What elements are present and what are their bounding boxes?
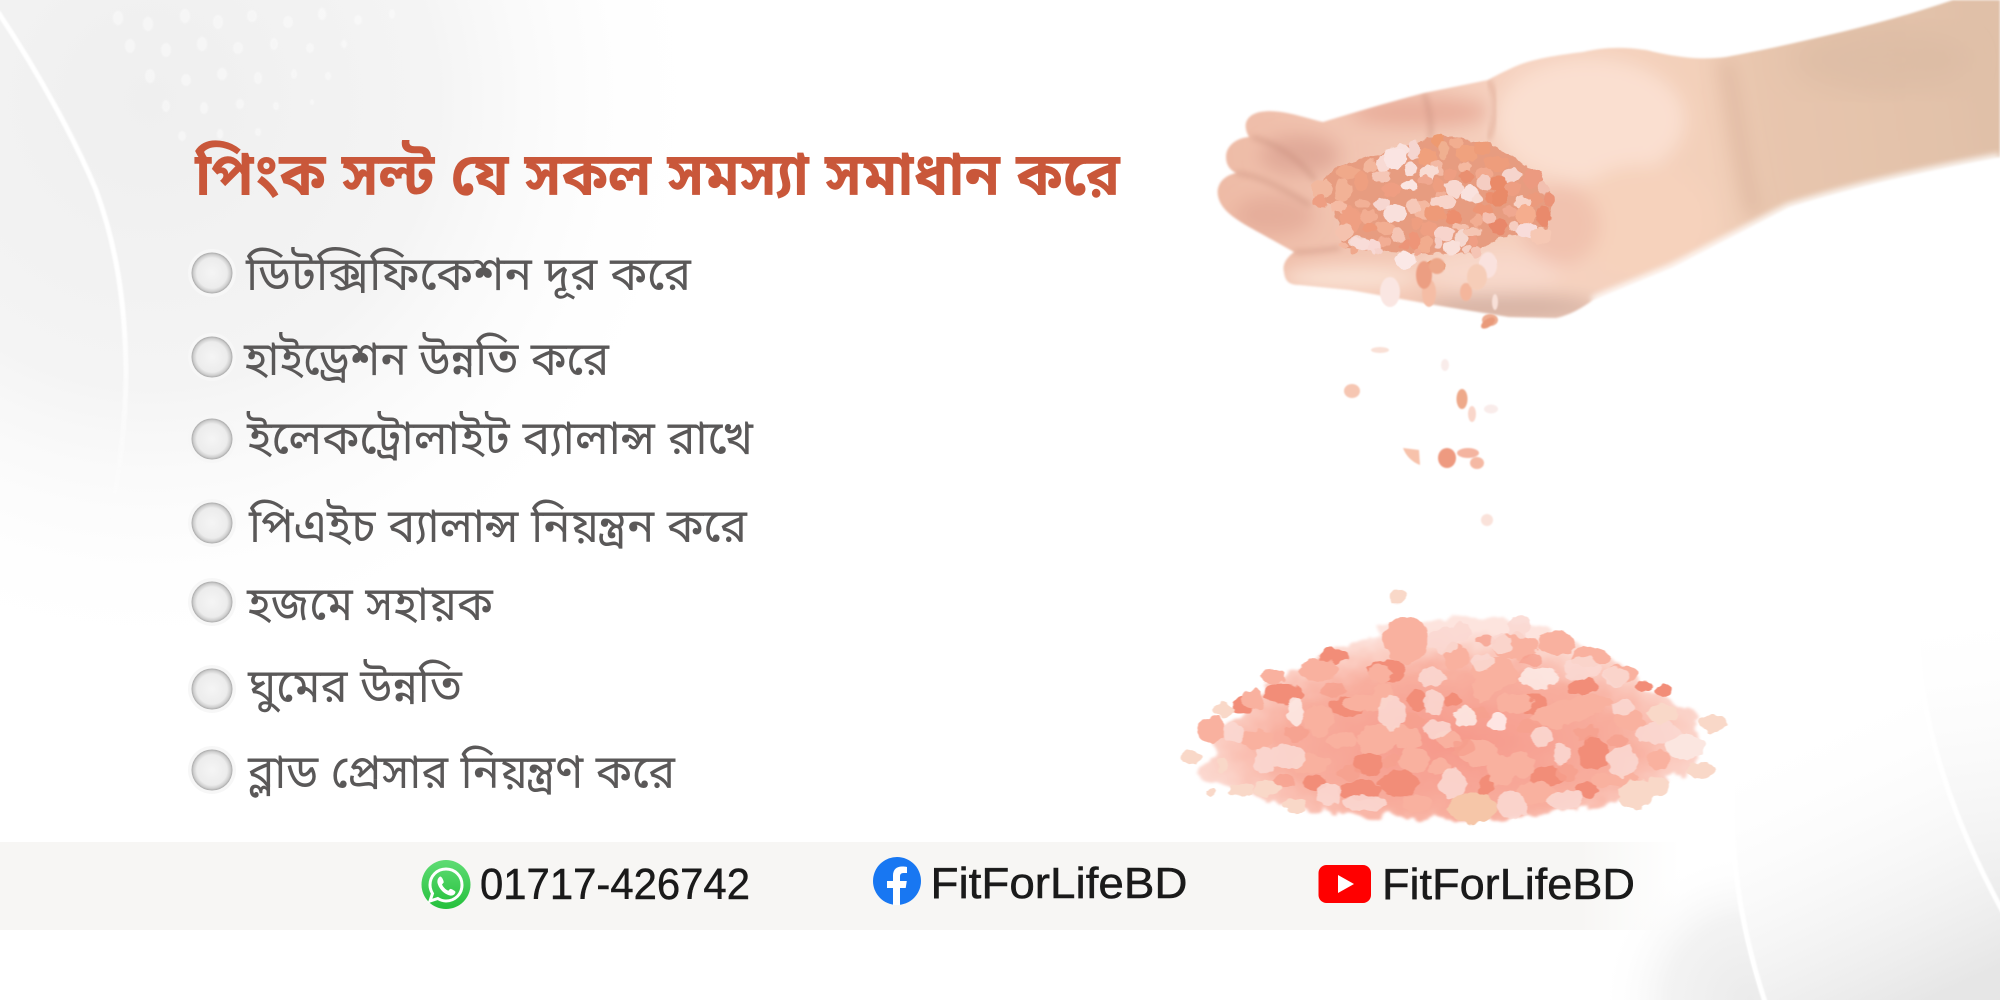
hand (1200, 0, 2000, 330)
list item 4: পিএইচ ব্যালান্স নিয়ন্ত্রন করে (248, 499, 748, 552)
icon: whatsapp (422, 860, 470, 909)
icon: youtube (1318, 865, 1371, 903)
list item 3: ইলেকট্রোলাইট ব্যালান্স রাখে (246, 411, 754, 464)
salt in palm (1311, 133, 1554, 272)
list item 2: হাইড্রেশন উন্নতি করে (243, 332, 610, 385)
list item 5: হজমে সহায়ক (246, 577, 494, 630)
list item 7: ব্লাড প্রেসার নিয়ন্ত্রণ করে (247, 745, 676, 798)
contact row (422, 857, 1635, 909)
falling salt grains (1344, 252, 1498, 604)
list item 6: ঘুমের উন্নতি (247, 659, 463, 713)
list item 1: ডিটক্সিফিকেশন দূর করে (245, 247, 692, 300)
phone number: 01717-426742 (480, 860, 750, 909)
youtube name: FitForLifeBD (1382, 860, 1635, 909)
contact bar background (0, 842, 1680, 930)
icon: facebook (873, 857, 921, 905)
illustration: hand holding pink salt (1179, 0, 2000, 824)
salt pile (1179, 589, 1728, 824)
title: পিংক সল্ট যে সকল সমস্যা সমাধান করে (194, 140, 1121, 208)
facebook name: FitForLifeBD (930, 859, 1188, 908)
list: benefits (188, 247, 754, 798)
